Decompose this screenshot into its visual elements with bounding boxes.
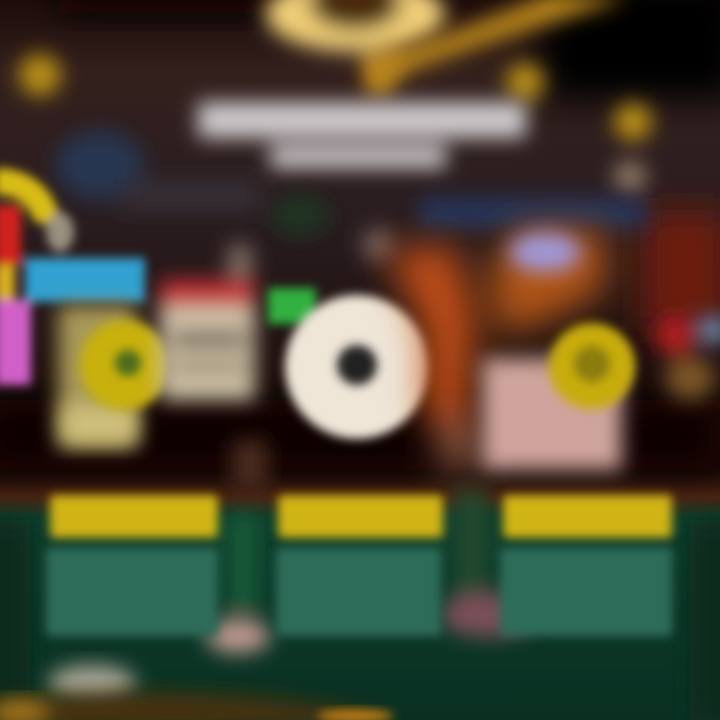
icon: gold dots	[19, 54, 652, 194]
title: blurred heading block	[198, 102, 526, 168]
icon: gold emblem at top	[265, 0, 445, 96]
button: column two header	[278, 495, 443, 538]
illustration: pink panel	[482, 358, 622, 470]
button: column three header	[503, 495, 672, 538]
icon: yellow poker chip with cream card	[58, 305, 170, 447]
icon: right yellow poker chip	[549, 323, 635, 409]
icon: green accent	[268, 288, 316, 324]
footer: white blur and gold arc	[0, 665, 400, 720]
panel: column three text	[500, 548, 672, 636]
button: column one header	[50, 495, 218, 538]
icon: large white chip	[285, 295, 429, 439]
panel: column two text	[276, 548, 441, 636]
subtitle band and blue smudges	[55, 130, 645, 262]
icon: purple white highlight	[509, 232, 581, 272]
panel: column one text	[46, 548, 218, 636]
illustration: red and white stack	[160, 242, 255, 400]
legs between columns	[206, 440, 536, 653]
decoration: gold swoosh	[370, 0, 628, 85]
illustration: orange figure	[385, 230, 605, 470]
illustration: colourful slot machine at left	[0, 168, 145, 385]
illustration: right edge figure	[655, 315, 720, 400]
